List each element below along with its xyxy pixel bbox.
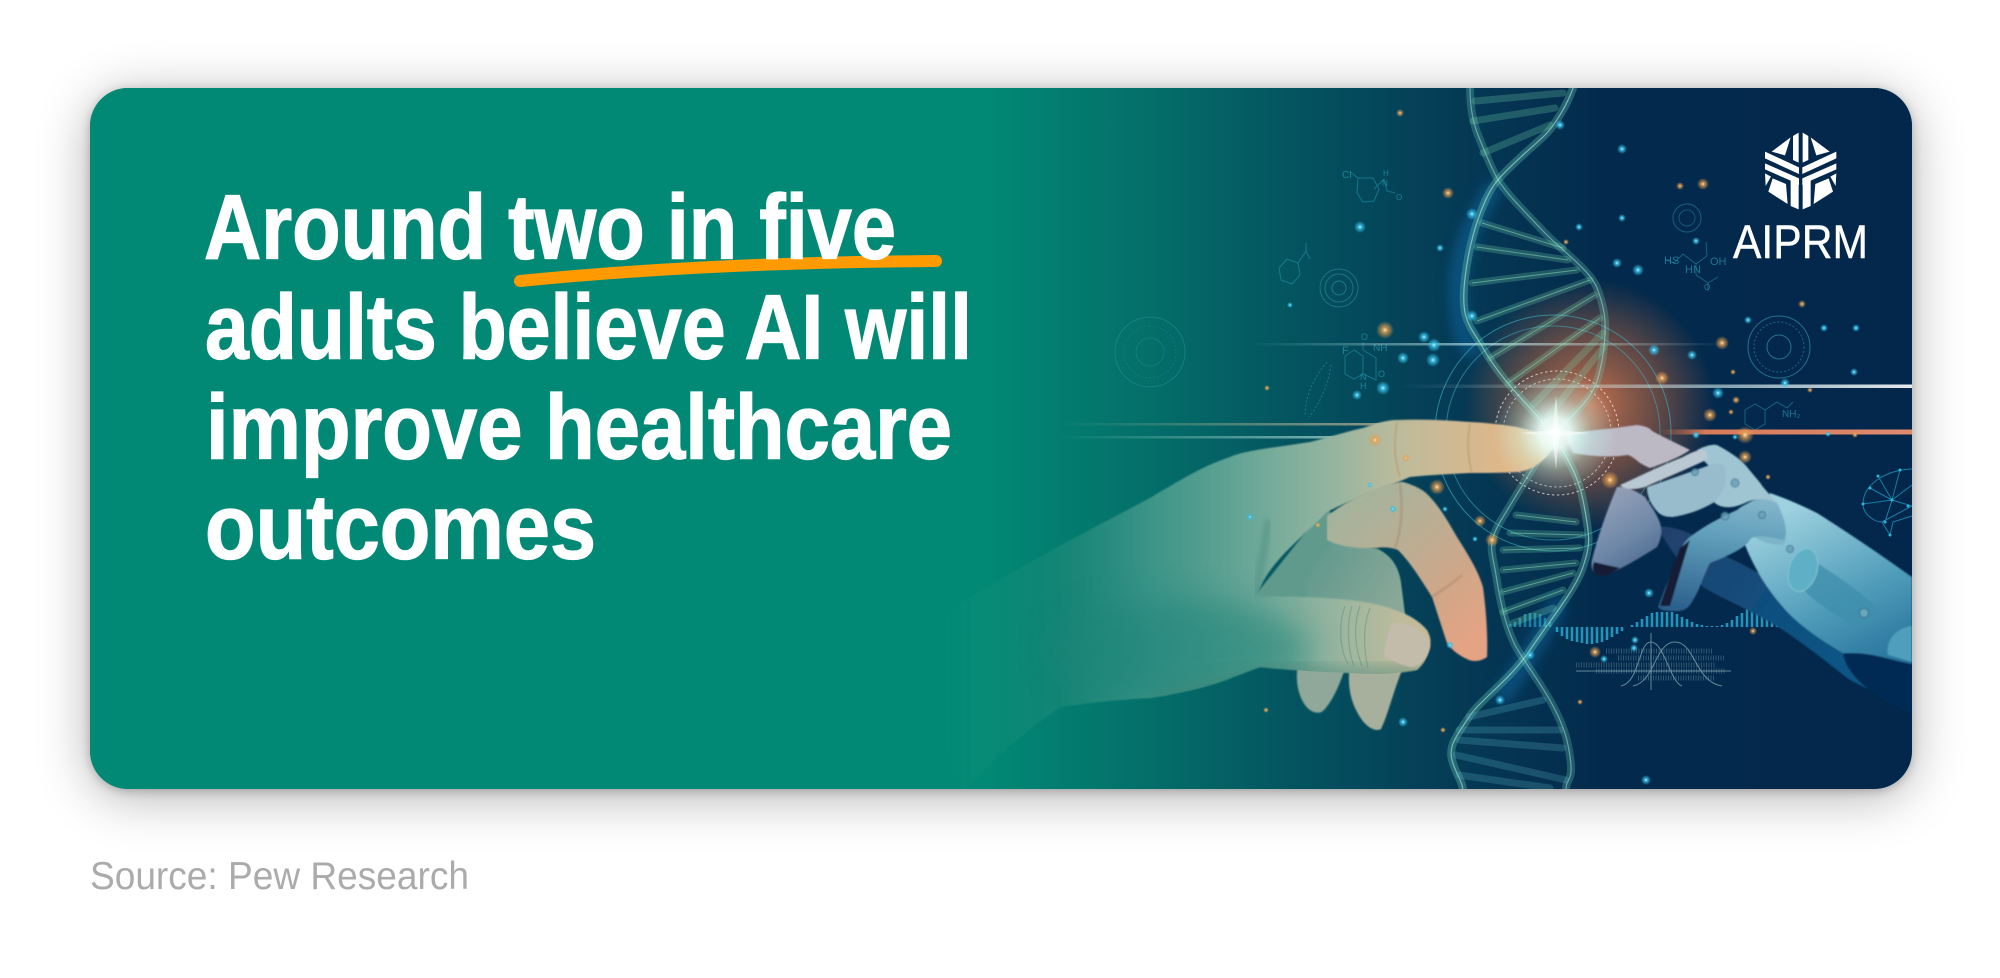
capsule screw xyxy=(1860,608,1868,618)
glowing particles xyxy=(1246,109,1860,785)
robot ring finger xyxy=(1658,501,1786,611)
faint circular HUD rings xyxy=(1115,204,1810,551)
forearm upper xyxy=(1745,493,1912,670)
palm and index finger xyxy=(1008,418,1552,744)
molecule diagrams xyxy=(1279,172,1793,430)
brain mesh xyxy=(1862,468,1912,536)
molecule labels: N xyxy=(1360,372,1366,382)
headline: adults believe AI will xyxy=(205,276,972,378)
DNA rung highlights xyxy=(1472,223,1600,612)
molecule labels: HN xyxy=(1685,264,1701,276)
forearm capsule xyxy=(1804,564,1870,616)
waveform xyxy=(1508,609,1778,644)
molecule labels: HS xyxy=(1664,255,1679,267)
logo wordmark: AIPRM xyxy=(1733,215,1868,268)
molecule labels: H xyxy=(1360,381,1366,391)
molecule labels: OH xyxy=(1710,256,1727,268)
headline: Around two in five xyxy=(204,176,896,278)
DNA helix front strand xyxy=(1451,88,1589,790)
headline: outcomes xyxy=(205,476,596,578)
molecule labels: NH xyxy=(1373,343,1387,354)
robot knuckles xyxy=(1692,468,1794,552)
headline xyxy=(204,176,972,578)
central flare xyxy=(1493,371,1617,495)
lower fingers xyxy=(1297,665,1404,730)
ring finger xyxy=(1308,546,1406,614)
molecule labels: H xyxy=(1383,169,1389,178)
thumb nail xyxy=(1384,623,1430,667)
card background shadow xyxy=(90,88,1912,789)
DNA rungs xyxy=(1456,93,1603,788)
blue glow along helix xyxy=(1458,185,1560,700)
robot finger B xyxy=(1646,464,1714,518)
middle finger xyxy=(1327,482,1487,661)
molecule labels: O xyxy=(1704,283,1710,292)
robot knuckle block xyxy=(1697,445,1777,507)
source note: Source: Pew Research xyxy=(90,855,469,898)
highlight underline xyxy=(520,261,936,281)
headline: improve healthcare xyxy=(206,376,952,478)
bell curve chart xyxy=(1576,633,1731,690)
infographic artwork xyxy=(90,88,1912,890)
DNA helix rear strand xyxy=(1470,88,1605,790)
dark fingertips xyxy=(1593,540,1690,606)
finger joint creases xyxy=(1395,422,1472,476)
robot finger A xyxy=(1620,450,1707,489)
panel: green-to-navy banner xyxy=(90,88,1912,790)
middle finger creases xyxy=(1395,484,1462,597)
molecule labels: O xyxy=(1396,193,1402,202)
elbow ring xyxy=(1887,626,1912,662)
human hand xyxy=(1008,418,1552,744)
molecule labels: F xyxy=(1342,345,1349,357)
orange glow behind fingertip xyxy=(1465,280,1715,530)
molecule labels: Cl xyxy=(1342,170,1351,181)
wrist joint xyxy=(1788,549,1820,592)
molecule labels: NH₂ xyxy=(1782,409,1800,420)
wrist plates xyxy=(1747,498,1786,545)
elbow dark lens xyxy=(1843,653,1912,713)
palm backing under index xyxy=(1256,510,1406,614)
molecule labels: O xyxy=(1378,369,1385,379)
light streaks xyxy=(1250,343,1730,346)
robot hand xyxy=(1565,425,1912,713)
thumb wrinkles xyxy=(1341,606,1370,668)
forearm lower xyxy=(1660,526,1868,689)
data dashes xyxy=(1576,651,1725,678)
palm shading xyxy=(1113,520,1422,698)
robot finger C xyxy=(1591,487,1661,576)
molecule labels xyxy=(1342,169,1800,420)
molecule labels: O xyxy=(1361,332,1368,342)
logo: AIPRM emblem xyxy=(1765,133,1836,209)
robot index finger xyxy=(1565,425,1690,468)
molecule labels: N xyxy=(1382,179,1388,188)
